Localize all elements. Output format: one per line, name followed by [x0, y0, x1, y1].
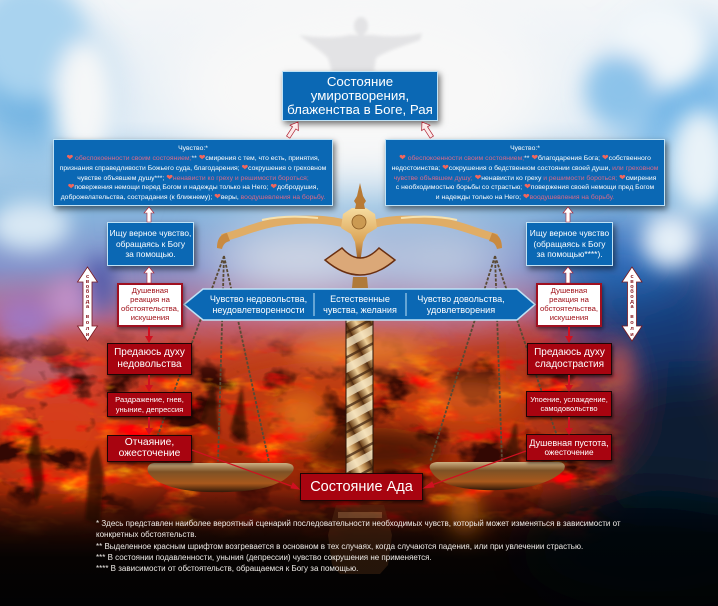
right free will double arrow: о [630, 284, 634, 290]
arrow: right box to paradise [418, 119, 436, 140]
arrow: left seek to feelings [144, 207, 154, 222]
footnotes: **** В зависимости от обстоятельств, обращаемся к Богу за помощью. [96, 564, 358, 573]
left yielding box: недовольства [117, 359, 182, 370]
scale left pan [148, 463, 294, 492]
right reaction box: реакция на [549, 295, 589, 304]
right free will double arrow: о [630, 294, 634, 300]
footnotes: *** В состоянии подавленности, уныния (депрессии) чувство сокрушения не применяется. [96, 553, 432, 562]
right seek box: Ищу верное чувство [530, 228, 609, 238]
left free will double arrow: л [86, 326, 90, 332]
left free will double arrow: с [86, 274, 89, 280]
right free will double arrow [622, 267, 642, 341]
banner center text: Естественные [330, 294, 390, 304]
right free will double arrow: л [630, 326, 634, 332]
hell state box: Состояние Ада [310, 479, 413, 495]
banner right text: Чувство довольства, [417, 294, 505, 304]
scale chains [148, 256, 566, 462]
right pleasure box: самодовольство [540, 404, 598, 413]
arrow: left reaction to seek [144, 267, 154, 283]
banner right text [417, 294, 505, 315]
top box: state of paradise: Состояние [327, 74, 393, 89]
scale right pan [430, 462, 565, 490]
right emptiness box: ожесточение [544, 448, 594, 456]
banner left text: неудовлетворенности [212, 304, 305, 314]
hell state box [300, 473, 423, 501]
left free will double arrow: о [86, 294, 90, 300]
left yielding box [107, 343, 192, 375]
left free will double arrow: б [86, 288, 90, 295]
left despair box [107, 435, 192, 462]
right emptiness box: Душевная пустота, [529, 438, 609, 448]
banner left text [210, 294, 307, 315]
left despair box: Отчаяние, [125, 437, 174, 448]
red arrows: left descent [145, 327, 153, 435]
banner right text: удовлетворения [427, 304, 495, 314]
left free will double arrow: а [86, 304, 90, 310]
banner center text [323, 294, 397, 315]
left free will double arrow: в [86, 314, 90, 320]
right feelings box: и надежды только на Него; ❤воодушевления на борьбу. [436, 192, 614, 201]
left feelings box: признания справедливости Божьего суда, благодарения; ❤сокрушения о греховном [60, 163, 326, 172]
footnotes: конкретных обстоятельств. [96, 530, 197, 539]
right free will double arrow: а [630, 304, 634, 310]
scale base [328, 505, 392, 574]
scale post [346, 318, 373, 486]
top box: state of paradise: умиротворения, [311, 88, 409, 103]
left free will double arrow: о [86, 320, 90, 326]
left free will double arrow [78, 267, 98, 341]
right reaction box [536, 283, 602, 327]
light silhouette of Christ [299, 17, 422, 72]
right free will double arrow: и [630, 332, 634, 338]
right seek box: (обращаясь к Богу [534, 239, 605, 249]
arrow: right seek to feelings [563, 207, 573, 222]
right feelings box: чувстве объявшем душу; ❤ненависти ко греху и решимости бороться; ❤смирения [394, 172, 656, 182]
right reaction box: Душевная [551, 286, 587, 295]
left feelings box [53, 139, 333, 206]
left seek box: обращаясь к Богу [116, 239, 185, 249]
left reaction box: обстоятельства, [121, 304, 179, 313]
right yielding box [527, 343, 612, 375]
right free will double arrow: в [630, 279, 634, 285]
right free will double arrow: в [630, 314, 634, 320]
left feelings box: ❤повержения немощи перед Богом и надежды только на Него; ❤добродушия, [68, 182, 318, 191]
scale beam with dial [217, 183, 502, 288]
center banner arrow [183, 288, 536, 321]
left feelings box: чувстве объявшем душу***; ❤ненависти ко греху и решимости бороться; [77, 172, 309, 182]
right pleasure box [526, 391, 612, 417]
footnotes: * Здесь представлен наиболее вероятный сценарий последовательности необходимых чувств, который может изменяться в зависимости от [96, 519, 621, 528]
arrow: despair to hell [192, 450, 299, 489]
banner center text: чувства, желания [323, 304, 397, 314]
top box: state of paradise [282, 71, 438, 121]
right feelings box: с необходимостью борьбы со страстью; ❤повержения своей немощи пред Богом [396, 182, 654, 191]
left feelings box: доброжелательства, сострадания (к ближнему); ❤веры, воодушевления на борьбу. [61, 192, 325, 201]
left seek box [107, 222, 194, 266]
right yielding box: Предаюсь духу [534, 347, 605, 358]
left free will double arrow: д [86, 299, 90, 305]
right reaction box: обстоятельства, [540, 304, 598, 313]
right feelings box: недостоинства; ❤сокрушения о бедственном состоянии своей души, или греховном [392, 163, 658, 172]
right feelings box: Чувство:* [510, 145, 540, 152]
arrow: right reaction to seek [563, 267, 573, 283]
left reaction box: реакция на [130, 295, 170, 304]
left free will double arrow: о [86, 284, 90, 290]
right emptiness box [526, 434, 612, 461]
right free will double arrow: д [630, 299, 634, 305]
right free will double arrow: с [630, 274, 634, 280]
left despair box: ожесточение [119, 448, 180, 458]
right seek box [526, 222, 613, 266]
footnotes [96, 519, 621, 573]
right feelings box [385, 139, 665, 206]
left feelings box: ❤ обеспокоенности своим состоянием;** ❤смирения с тем, что есть, принятия, [66, 153, 320, 162]
right reaction box: искушения [550, 313, 588, 322]
right free will double arrow: б [630, 288, 634, 295]
left reaction box: Душевная [132, 286, 168, 295]
red arrows: right descent [565, 327, 573, 435]
right free will double arrow: о [630, 320, 634, 326]
left seek box: Ищу верное чувство, [110, 228, 191, 238]
left seek box: за помощью. [125, 249, 176, 259]
right yielding box: сладострастия [535, 359, 604, 370]
arrow: left box to paradise [284, 119, 302, 140]
right seek box: за помощью****). [536, 249, 603, 259]
left reaction box: искушения [131, 313, 169, 322]
left irritation box: Раздражение, гнев, [115, 395, 184, 404]
footnotes: ** Выделенное красным шрифтом возгревается в основном в тех случаях, когда случаются падения, или при увлечении страстью. [96, 542, 583, 551]
left free will double arrow: в [86, 279, 90, 285]
lava texture [0, 331, 626, 534]
left reaction box [117, 283, 183, 327]
left yielding box: Предаюсь духу [114, 347, 185, 358]
arrow: emptiness to hell [424, 451, 526, 488]
left feelings box: Чувство:* [178, 145, 208, 152]
left free will double arrow: и [86, 332, 90, 338]
lava spires [28, 380, 522, 525]
left irritation box: уныние, депрессия [116, 404, 183, 414]
right feelings box: ❤ обеспокоенности своим состоянием;** ❤благодарения Бога; ❤собственного [399, 153, 651, 162]
top box: state of paradise: блаженства в Боге, Рая [287, 102, 433, 117]
banner left text: Чувство недовольства, [210, 294, 307, 304]
right pleasure box: Упоение, услаждение, [530, 394, 608, 404]
left irritation box [107, 392, 192, 417]
